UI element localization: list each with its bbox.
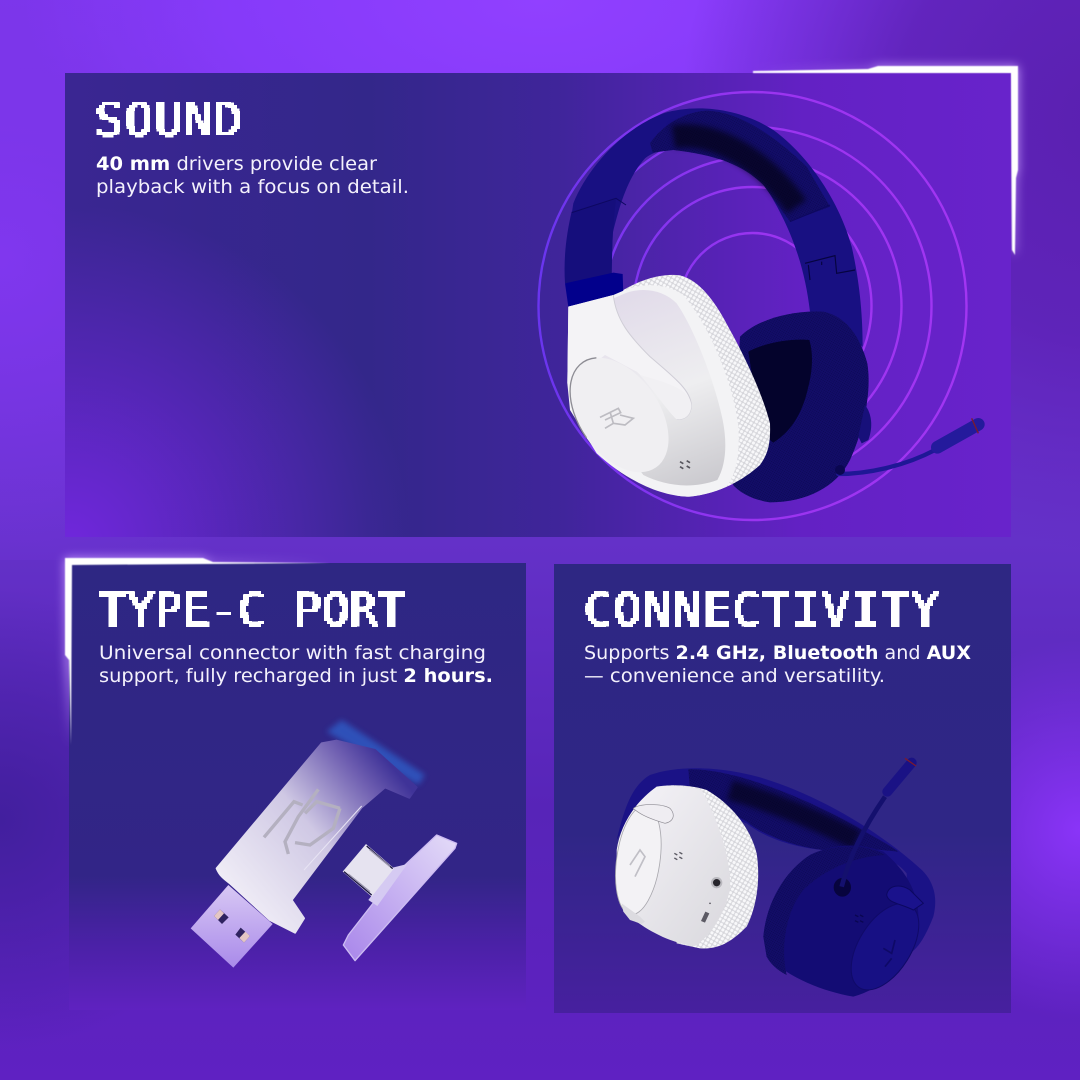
panel: connectivity xyxy=(554,564,1011,1013)
corner highlight: type-c panel xyxy=(65,558,330,745)
hinge clip xyxy=(805,256,855,280)
far earcup opening xyxy=(748,340,812,443)
near earcup knob xyxy=(633,805,673,823)
corner highlight: sound panel xyxy=(753,66,1018,255)
yoke arm shadow xyxy=(613,295,691,419)
far cup microphone holes xyxy=(855,915,863,922)
heading: sound: SOUND xyxy=(95,93,242,147)
heading: connectivity: CONNECTIVITY xyxy=(584,583,939,637)
control disc xyxy=(550,340,689,490)
microphone boom xyxy=(834,758,916,897)
text: type-c description xyxy=(99,642,493,687)
text: connectivity description: Supports 2.4 GHz, Bluetooth and AUX xyxy=(584,642,971,664)
text: sound description: playback with a focus on detail. xyxy=(96,176,409,198)
far earcup cushion xyxy=(732,311,869,502)
headset: white, front three-quarter view xyxy=(550,108,978,502)
usb-a plug holes xyxy=(214,909,250,943)
sound wave rings xyxy=(538,92,966,520)
panel background: sound xyxy=(65,73,1011,537)
icon: brand logo on near cup xyxy=(630,850,645,877)
usb-c connector xyxy=(343,844,394,897)
blue slider band xyxy=(565,273,623,307)
headband xyxy=(617,768,935,953)
near earcup rim xyxy=(567,285,739,497)
far earcup disc xyxy=(837,892,933,1001)
headband shell xyxy=(565,108,863,347)
panel: type-c port xyxy=(65,558,526,1010)
near earcup cushion mesh xyxy=(623,275,770,497)
text: connectivity description: — convenience and versatility. xyxy=(584,665,885,687)
headband cushion shade xyxy=(673,136,797,207)
icon: brand logo on adapter xyxy=(264,789,340,854)
adapter inner ridge xyxy=(304,806,362,870)
panel background: type-c xyxy=(69,563,526,1010)
far earcup knob xyxy=(887,886,923,910)
text: sound description: 40 mm drivers provide clear xyxy=(96,153,377,175)
adapter body xyxy=(217,741,417,933)
usb-c connector neck xyxy=(368,864,407,906)
microphone boom xyxy=(835,418,978,475)
aux jack xyxy=(711,877,722,888)
near earcup shell xyxy=(617,786,730,946)
headset: folded rear view xyxy=(609,758,935,1001)
usb-c adapter xyxy=(191,720,457,968)
indicator light xyxy=(709,902,711,904)
near earcup mesh xyxy=(657,785,758,949)
far earcup xyxy=(763,846,918,997)
panel: sound xyxy=(65,66,1018,537)
blue glow at adapter top xyxy=(327,720,425,785)
headband cushion mesh xyxy=(650,111,830,222)
far earcup mesh xyxy=(763,846,885,975)
usb-c charging port xyxy=(701,912,709,923)
near cup microphone holes xyxy=(674,852,682,860)
near earcup inner face xyxy=(572,290,725,485)
text: connectivity description xyxy=(584,642,971,687)
heading: type-c port: TYPE-C PORT xyxy=(99,583,405,637)
text: sound description xyxy=(96,153,409,198)
icon: brand logo xyxy=(600,408,633,428)
corner glow: type-c panel xyxy=(65,558,330,745)
headband cushion shade xyxy=(730,790,857,840)
usb-c cap plate xyxy=(343,835,457,961)
microphone holes xyxy=(680,461,690,469)
usb-a plug xyxy=(191,885,273,968)
text: type-c description: Universal connector with fast charging xyxy=(99,642,486,664)
lower clip xyxy=(622,903,645,924)
arm tip over disc xyxy=(640,375,691,419)
icon: brand logo on far cup xyxy=(883,940,895,967)
headband fold seam xyxy=(572,198,830,222)
yoke arm xyxy=(567,295,691,419)
text: type-c description: support, fully recharged in just 2 hours. xyxy=(99,665,493,687)
headband left outer panel xyxy=(565,198,616,283)
panel background: connectivity xyxy=(554,564,1011,1013)
headband cushion mesh xyxy=(688,769,898,852)
far earcup side knob xyxy=(858,405,871,443)
near earcup disc xyxy=(609,803,667,917)
corner glow: sound panel xyxy=(753,66,1018,255)
